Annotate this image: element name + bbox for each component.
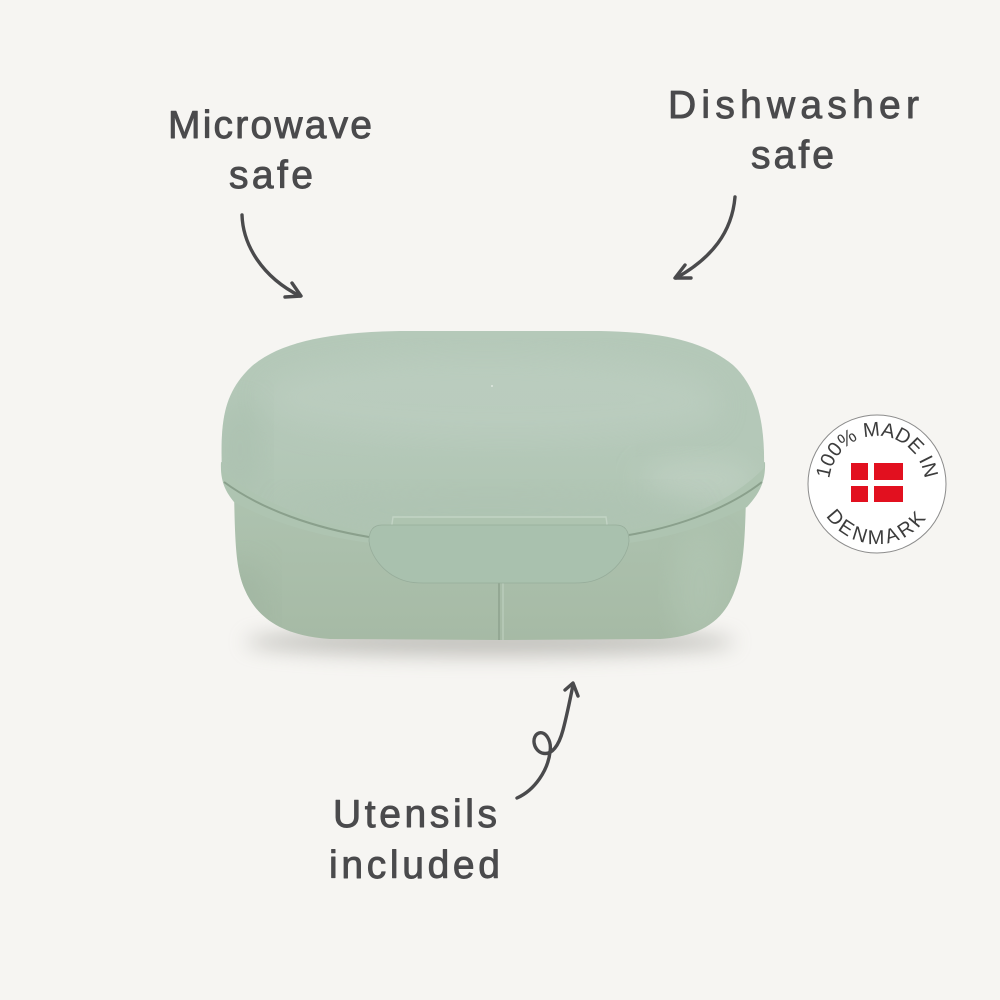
clasp <box>369 525 629 583</box>
arrow: microwave safe <box>242 215 301 297</box>
heading: Dishwasher safe: safe <box>751 134 834 177</box>
arrow: dishwasher safe <box>675 197 735 278</box>
heading: Microwave safe <box>168 104 372 197</box>
box rim <box>221 462 765 543</box>
heading: Microwave safe: Microwave <box>168 104 372 147</box>
badge text: bottom arc: DENMARK <box>826 508 926 544</box>
heading: Utensils included: Utensils <box>333 793 497 836</box>
clasp hinge <box>392 517 607 530</box>
box base <box>234 502 746 640</box>
box lid <box>216 331 764 532</box>
icon: Danish flag <box>851 463 903 502</box>
badge: 100% made in Denmark <box>808 414 946 554</box>
heading: Dishwasher safe: Dishwasher <box>668 84 919 127</box>
box shadow <box>245 628 735 656</box>
heading: Utensils included: included <box>329 844 500 887</box>
product: lunch box <box>210 331 765 660</box>
badge text: top arc: 100% MADE IN <box>816 422 938 478</box>
heading: Microwave safe: safe <box>229 154 313 197</box>
heading: Utensils included <box>329 793 500 887</box>
arrow: utensils included <box>517 683 578 798</box>
heading: Dishwasher safe <box>668 84 919 177</box>
